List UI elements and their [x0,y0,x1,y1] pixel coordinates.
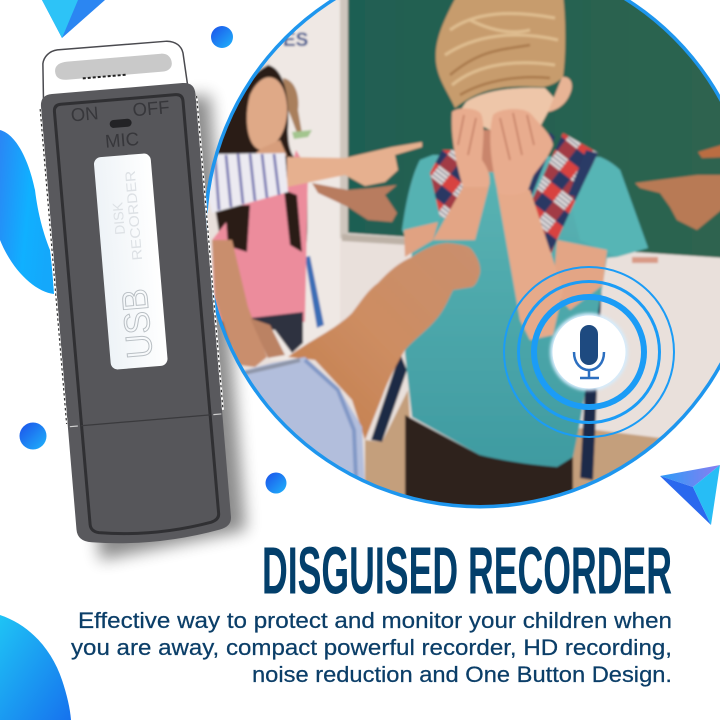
decorative dot: left [20,422,46,450]
photo circle: children pointing at boy [200,0,720,520]
metal loop [39,39,188,102]
boy left hand [452,108,490,187]
girl pointing arm [287,142,422,187]
dark strap left [371,353,407,442]
girl left arm [212,240,267,367]
foreground sleeve [244,356,366,480]
pointing finger upper right [698,144,720,158]
boy right hand [490,109,553,195]
white label: USB [114,287,160,360]
on off labels [70,96,173,154]
body text: noise reduction and One Button Design. [252,662,672,687]
on off labels: OFF [132,96,170,120]
decorative dot: top [211,26,233,48]
girl jeans [216,312,303,353]
white label [93,153,168,370]
device shadow [60,95,246,560]
body text: Effective way to protect and monitor your children when [78,608,672,633]
boy pants [404,414,574,505]
device body [40,82,232,548]
body text [71,608,672,687]
tray item [632,257,658,263]
backpack strap right [532,133,598,257]
inner panel [54,94,220,538]
girl hair back [214,64,308,242]
girl shirt [212,150,308,322]
boy shirt body [402,155,648,467]
mic slot [109,118,132,128]
strap right [580,258,603,480]
classroom wall [200,0,720,520]
floor [364,390,660,495]
girl face [247,77,287,150]
body text: you are away, compact powerful recorder, HD recording, [71,635,672,660]
decorative blob: lower left [0,615,71,720]
USB recorder device [35,39,233,548]
pointing hand right [635,175,720,230]
striped sleeve [207,153,288,213]
icon: microphone with sound rings [504,267,674,437]
decorative dot: centre [266,472,286,494]
wall lettering: ES [283,30,308,51]
poster horse [283,78,302,133]
on off labels: MIC [104,128,140,152]
boy hair [436,0,565,108]
backpack strap left [430,150,468,218]
back strap [305,256,324,328]
cap seam [70,414,221,427]
boy right arm [553,240,607,310]
girl second arm [312,183,397,222]
foreground arm [288,243,480,440]
green board [348,0,720,258]
on off labels: ON [70,102,99,125]
decorative triangle: right [660,465,720,525]
white label: RECORDER [122,170,145,261]
boy chin [480,128,494,174]
boy left forearm [433,182,490,240]
decorative blob: upper left [0,130,54,294]
white label: DISK [109,201,128,235]
girl hair front [225,190,302,252]
boy forehead and ear [458,88,556,130]
decorative triangle: top [42,0,105,38]
